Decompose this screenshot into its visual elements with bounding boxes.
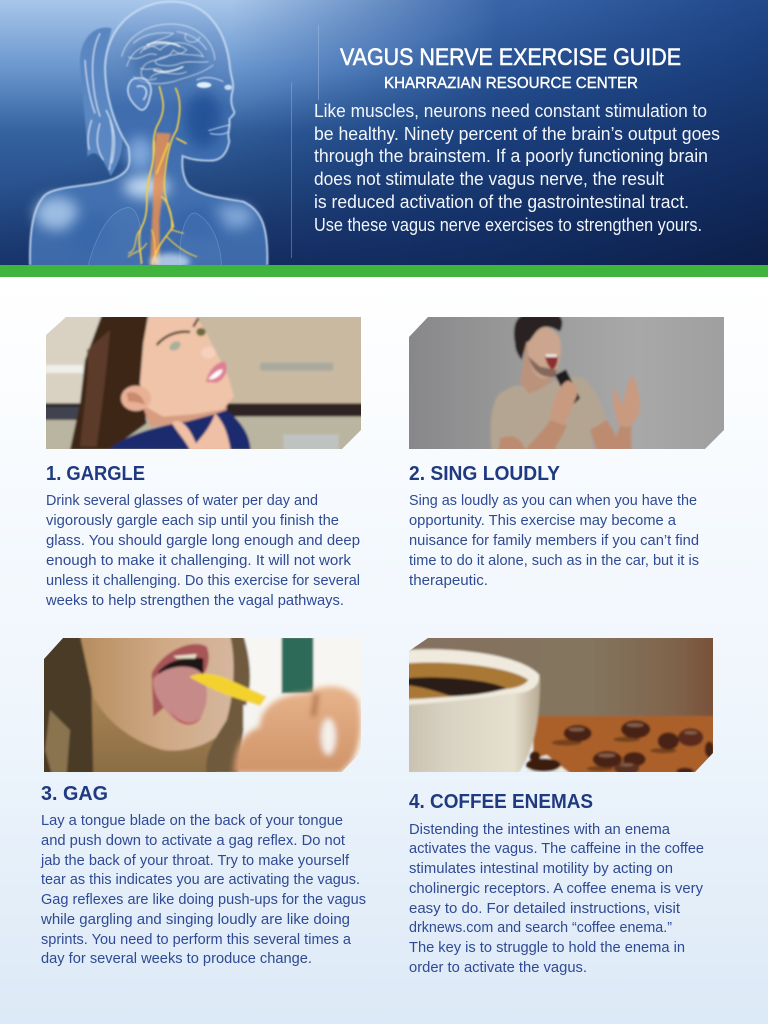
figure shading — [35, 37, 253, 253]
body text: gag: sprints. You need to perform this several times a — [41, 932, 352, 948]
body text: coffee enemas: easy to do. For detailed instructions, visit — [409, 901, 680, 917]
header paragraph — [314, 101, 720, 235]
body text: sing loudly — [409, 493, 699, 589]
photo: woman gargling — [46, 317, 361, 449]
body text: coffee enemas: drknews.com and search “coffee enema.” — [409, 920, 672, 936]
face details — [197, 77, 232, 134]
photo: tongue blade gag — [44, 638, 361, 772]
body text: gag: Gag reflexes are like doing push-ups for the vagus — [41, 892, 366, 908]
ear — [128, 78, 151, 110]
photo: coffee cup and beans — [409, 638, 713, 772]
heading: gag: 3. GAG — [41, 783, 108, 805]
body text: gargle: unless it challenging. Do this exercise for several — [46, 573, 360, 589]
body text: gag: Lay a tongue blade on the back of your tongue — [41, 813, 343, 829]
header paragraph: be healthy. Ninety percent of the brain’s output goes — [314, 124, 720, 144]
brain — [122, 24, 215, 84]
section 3: gag — [40, 783, 366, 967]
ponytail — [80, 28, 123, 176]
body text: gag: jab the back of your throat. Try to make yourself — [40, 853, 350, 869]
body text: gargle: vigorously gargle each sip until you finish the — [46, 513, 339, 529]
body text: sing loudly: opportunity. This exercise may become a — [409, 513, 677, 529]
illustration: translucent human figure with vagus nerve — [30, 2, 267, 270]
section 1: gargle — [45, 463, 360, 609]
body text: gag — [40, 813, 366, 967]
lower chest glow — [150, 253, 190, 270]
body and head silhouette — [30, 2, 267, 265]
body text: gag: and push down to activate a gag reflex. Do not — [41, 833, 345, 849]
header paragraph: does not stimulate the vagus nerve, the result — [314, 169, 664, 189]
lungs outline — [88, 207, 222, 265]
body text: gag: tear as this indicates you are activating the vagus. — [41, 872, 360, 888]
body text: coffee enemas: The key is to struggle to hold the enema in — [409, 940, 685, 956]
body text: sing loudly: Sing as loudly as you can when you have the — [409, 493, 697, 509]
photo: man singing loudly — [409, 317, 724, 449]
header paragraph: Use these vagus nerve exercises to strengthen yours. — [314, 215, 702, 235]
body text: coffee enemas — [409, 822, 704, 976]
vagus nerve — [128, 87, 197, 263]
section 4: coffee enemas — [409, 791, 704, 976]
body text: coffee enemas: activates the vagus. The caffeine in the coffee — [409, 841, 704, 857]
body text: coffee enemas: cholinergic receptors. A coffee enema is very — [409, 881, 704, 897]
body text: sing loudly: time to do it alone, such as in the car, but it is — [409, 553, 699, 569]
header banner — [0, 0, 768, 265]
header paragraph: Like muscles, neurons need constant stimulation to — [314, 101, 707, 121]
section 2: sing loudly — [409, 463, 699, 589]
body text: gargle: glass. You should gargle long enough and deep — [46, 533, 360, 549]
body text: coffee enemas: order to activate the vagus. — [409, 960, 587, 976]
body text: gargle — [45, 493, 360, 609]
body text: gargle: Drink several glasses of water per day and — [46, 493, 318, 509]
esophagus — [150, 133, 171, 265]
figure rim light — [30, 2, 267, 265]
body text: gag: day for several weeks to produce change. — [41, 951, 312, 967]
body text: gargle: enough to make it challenging. It will not work — [46, 553, 352, 569]
header subtitle: KHARRAZIAN RESOURCE CENTER — [384, 75, 638, 92]
body text: gag: while gargling and singing loudly are like doing — [40, 912, 350, 928]
heading: coffee enemas: 4. COFFEE ENEMAS — [409, 791, 593, 813]
heading: gargle: 1. GARGLE — [46, 463, 145, 485]
header paragraph: through the brainstem. If a poorly functioning brain — [314, 146, 708, 166]
body text: coffee enemas: stimulates intestinal motility by acting on — [409, 861, 673, 877]
heading: sing loudly: 2. SING LOUDLY — [409, 463, 561, 485]
body text: sing loudly: nuisance for family members if you can’t find — [409, 533, 699, 549]
header title: VAGUS NERVE EXERCISE GUIDE — [340, 44, 681, 71]
body text: coffee enemas: Distending the intestines with an enema — [409, 822, 671, 838]
header paragraph: is reduced activation of the gastrointestinal tract. — [314, 192, 689, 212]
body text: sing loudly: therapeutic. — [409, 573, 488, 589]
page background — [0, 277, 768, 1024]
green divider band — [0, 265, 768, 277]
body text: gargle: weeks to help strengthen the vagal pathways. — [45, 593, 344, 609]
